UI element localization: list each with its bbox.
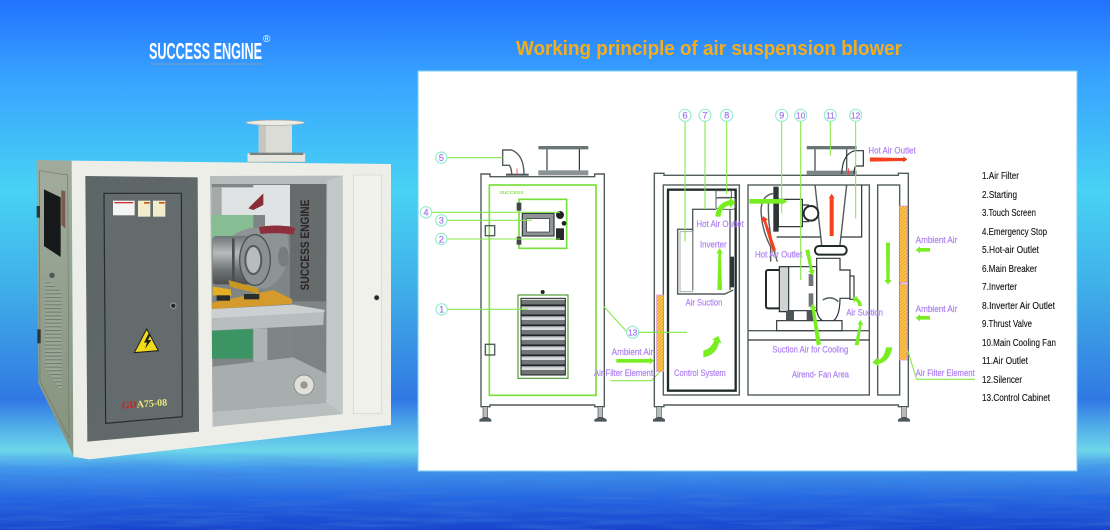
callout 3 [436,215,532,226]
legend: numbered parts list [982,171,1056,404]
legend: numbered parts list: 8.Inverter Air Outlet [982,301,1055,312]
legend: numbered parts list: 6.Main Breaker [982,264,1038,275]
label: air filter element, left: Air Filter Element [594,368,653,378]
red hot-air arrows [762,156,907,252]
top flange and elbow [807,146,863,175]
motor [213,236,253,284]
lower floor [213,357,326,412]
diagram: front view of cabinet [420,146,660,422]
legend: numbered parts list: 3.Touch Screen [982,208,1036,219]
callout 1: 1 [439,305,444,315]
brand on back wall: SUCCESS ENGINE [298,200,312,290]
legend: numbered parts list: 12.Silencer [982,375,1023,386]
green airflow arrows [703,197,930,367]
warning labels [113,201,165,217]
callout 9 [776,109,788,213]
airflow labels: Hot Air Outlet [755,249,803,259]
airflow labels: Ambient Air [916,304,957,314]
white diagram panel [418,71,1077,471]
legend: numbered parts list: 11.Air Outlet [982,356,1028,367]
outlet pipe on top of cabinet [246,120,305,162]
label: ambient air, left [612,347,654,364]
control panel [517,199,567,248]
airflow labels: Inverter [700,239,727,249]
feet [653,407,910,422]
cabinet outline: SUCCESS [499,190,524,196]
yellow base rails [212,290,292,309]
callout 13 [604,307,656,338]
callout 11: 11 [826,111,835,121]
callout 6 [679,109,691,242]
callout 2 [436,233,560,245]
airflow labels: Ambient Air [916,235,957,245]
airflow labels: Air Suction [846,308,883,318]
model number: GDA75-08 [121,398,168,412]
cabinet front frame [72,161,391,459]
legend: numbered parts list: 5.Hot-air Outlet [982,245,1039,256]
callout 10 [795,109,807,280]
shelf [212,305,325,318]
callout 3: 3 [439,216,444,226]
airflow labels: Airend- Fan Area [792,369,849,379]
open compartment with blower [210,176,343,427]
airflow labels [674,145,975,379]
legend: numbered parts list: 13.Control Cabinet [982,393,1050,404]
callout 8 [721,109,733,194]
volute behind motor [232,228,289,288]
silencer [777,185,862,255]
callout 7 [699,109,711,209]
brand heading: SUCCESS ENGINE: ® [263,34,271,45]
filter elements, right side [900,206,907,360]
pipe [212,185,290,226]
airflow labels: Suction Air for Cooling [772,344,848,354]
callout 4: 4 [423,208,429,218]
callout 6: 6 [682,111,688,121]
inverter and main breaker [678,191,735,294]
brand heading: SUCCESS ENGINE [149,34,271,64]
airflow labels: Hot Air Outlet [696,219,744,229]
side frame [327,176,343,414]
door lock [171,303,176,308]
airend fan compartment [748,185,869,395]
airflow labels: Hot Air Outlet [868,145,916,155]
motor and blower [766,258,854,331]
outer cabinet [654,173,908,407]
callout 12: 12 [851,111,861,121]
title: working principle: Working principle of air suspension blower [516,38,902,60]
callout 11 [824,109,836,156]
legend: numbered parts list: 1.Air Filter [982,171,1020,182]
callout 12 [850,109,862,218]
top outlet flange and elbow [502,146,588,176]
air filter vent [518,290,568,378]
callout 1 [436,304,528,315]
line from callout 13 [650,331,687,334]
feet [479,407,607,422]
filter element, control side [657,295,663,372]
cooling duct compartment [878,185,900,395]
airflow labels: Air Filter Element [916,368,975,378]
callout 5: 5 [439,153,444,163]
legend: numbered parts list: 7.Inverter [982,282,1018,293]
right side door [353,175,382,413]
legend: numbered parts list: 10.Main Cooling Fan [982,338,1056,349]
fan impeller [294,375,314,395]
control system compartment [663,185,739,395]
callout 4 [420,207,560,218]
callout 7: 7 [702,111,708,121]
legend: numbered parts list: 4.Emergency Stop [982,227,1047,238]
airflow labels: Control System [674,368,726,378]
callout 8: 8 [724,111,729,121]
brand heading: SUCCESS ENGINE: SUCCESS ENGINE [149,38,262,64]
thrust valve [761,187,818,262]
callout 10: 10 [796,111,806,121]
icon: high voltage warning [134,329,158,353]
airflow labels: Air Suction [686,297,722,307]
callout 5 [436,152,503,163]
label: ambient air, left: Ambient Air [612,347,653,357]
callout 9: 9 [779,111,784,121]
legend: numbered parts list: 2.Starting [982,190,1017,201]
machine photo: blower cabinet [37,120,391,459]
cabinet outline [481,174,604,407]
callout 2: 2 [439,234,444,244]
callout 13: 13 [628,328,638,338]
diagram: interior view [650,109,975,422]
grey control cabinet door [85,176,199,442]
cabinet side panel with window and vent [37,160,73,457]
legend: numbered parts list: 9.Thrust Valve [982,319,1032,330]
